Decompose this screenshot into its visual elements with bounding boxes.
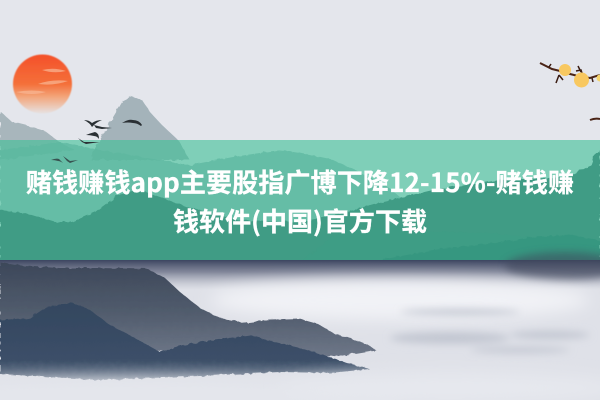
icon: bird 3 <box>122 120 142 126</box>
far mountain ridge <box>0 262 376 358</box>
distant mountains <box>0 96 190 160</box>
mist base <box>0 260 600 400</box>
icon: setting sun <box>13 54 72 114</box>
birds <box>51 120 142 163</box>
title text: 钱软件(中国)官方下载 <box>173 202 427 239</box>
dark top strip <box>0 260 600 290</box>
misty lower scene <box>0 252 600 400</box>
icon: bird 5 <box>78 138 100 144</box>
icon: bird 2 <box>94 125 112 129</box>
icon: bird 1 <box>84 120 102 127</box>
title text <box>26 163 574 239</box>
title text: 赌钱赚钱app主要股指广博下降12-15%-赌钱赚 <box>26 163 574 200</box>
mountains behind the band <box>0 142 600 262</box>
teal title band <box>0 140 600 260</box>
icon: plum branch with blossoms <box>540 63 600 120</box>
foreground mist <box>0 378 410 400</box>
near mountain ridge <box>0 302 370 380</box>
white cloud bank <box>210 280 590 320</box>
foreground mist right <box>280 372 600 400</box>
icon: bird 6 <box>51 159 63 163</box>
dark right corner <box>505 252 600 280</box>
icon: bird 4 <box>86 132 99 139</box>
grey cloud streaks <box>390 309 590 353</box>
icon: bird 7 <box>63 156 78 163</box>
